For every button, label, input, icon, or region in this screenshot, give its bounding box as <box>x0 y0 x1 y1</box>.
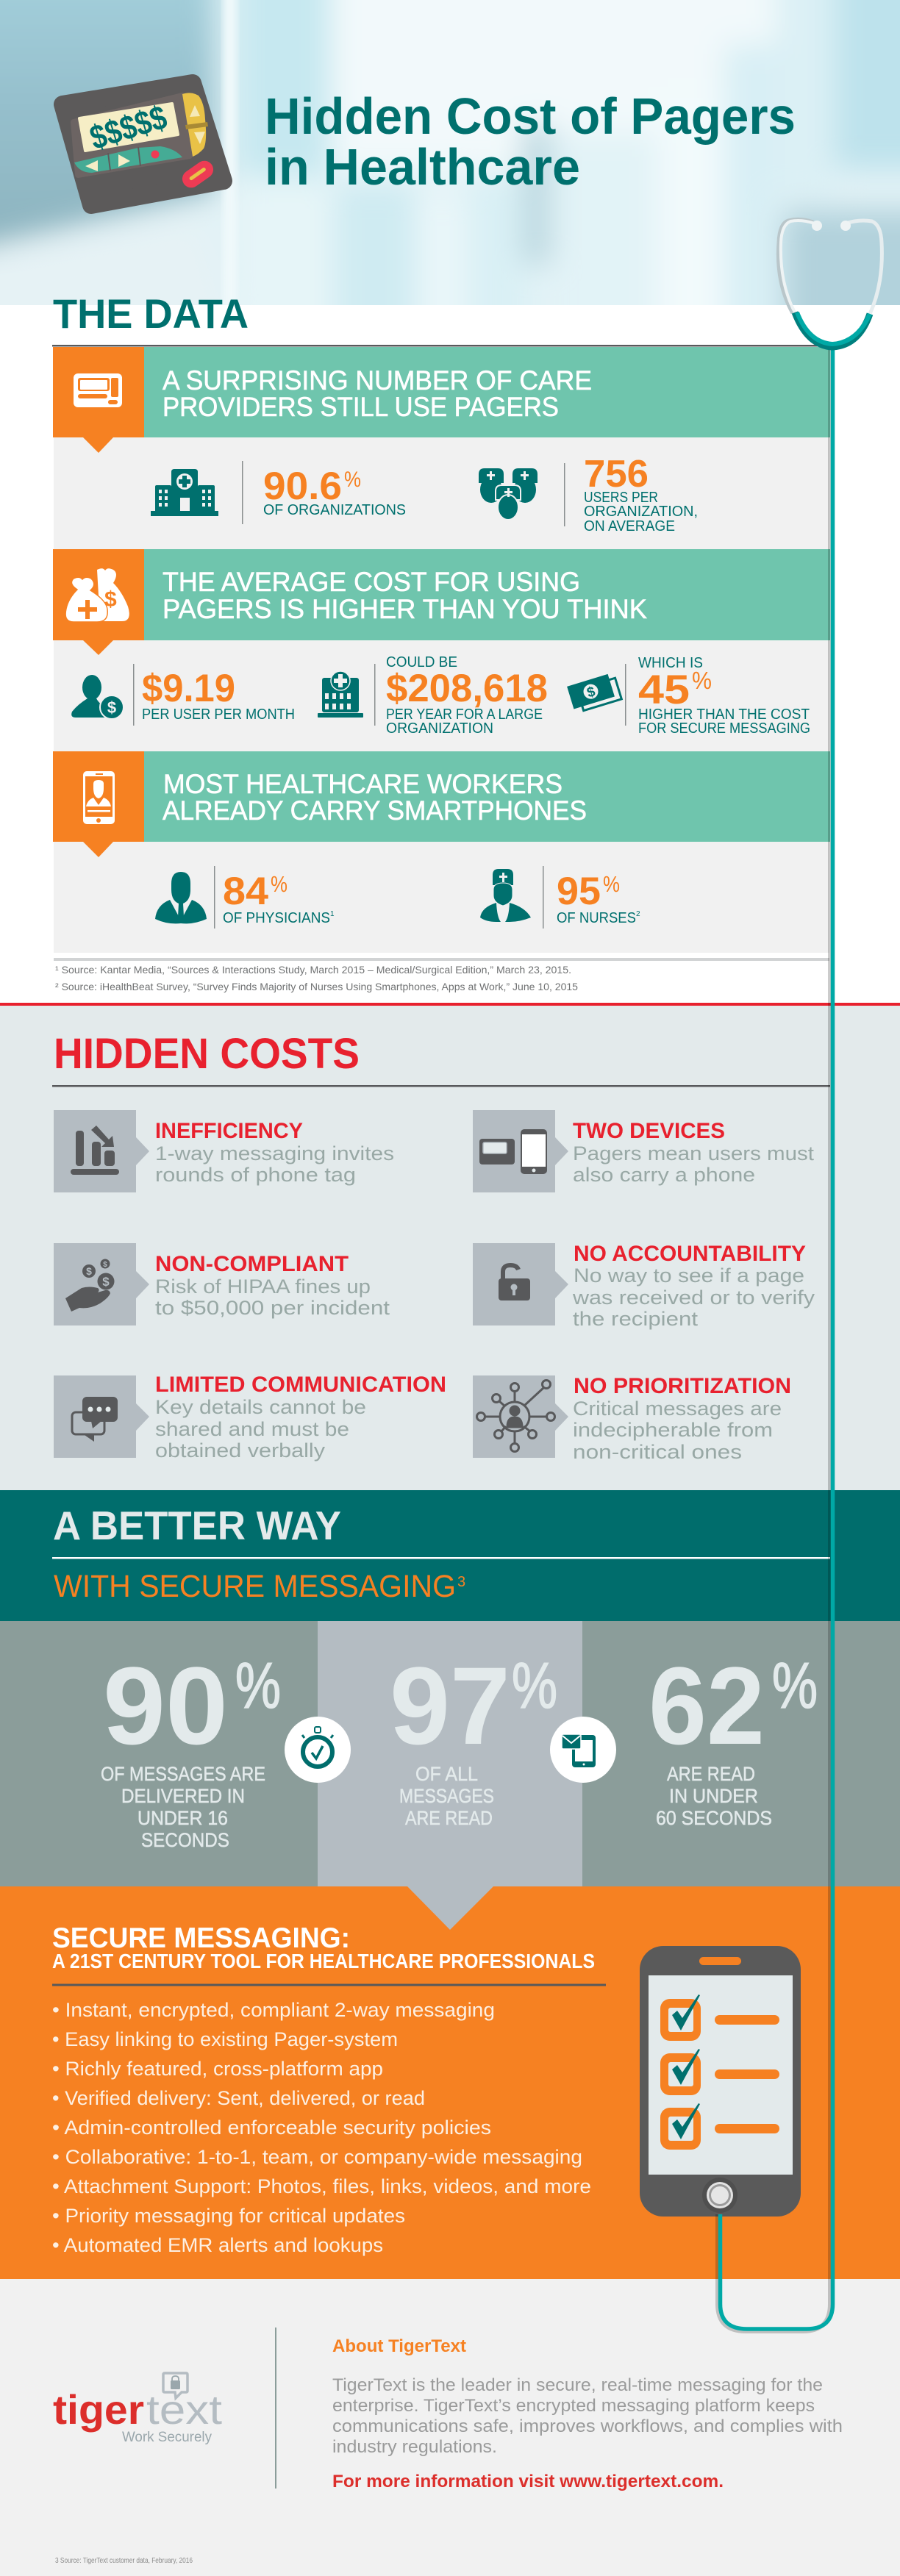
icon: stopwatch <box>285 1717 351 1783</box>
stat: 90 percent delivered: SECONDS <box>141 1829 229 1851</box>
stat: 756 users <box>584 453 698 534</box>
icon: cash: $ <box>585 684 597 701</box>
item: no prioritization: indecipherable from <box>573 1419 773 1441</box>
stat: 90 percent delivered: % <box>235 1649 281 1722</box>
icon: network <box>476 1381 554 1451</box>
item: limited communication: Key details cannot be <box>155 1396 366 1418</box>
icon: money bags: $ <box>104 587 117 612</box>
stat: 90 percent delivered: OF MESSAGES ARE <box>101 1763 265 1785</box>
feature list <box>52 1999 591 2256</box>
stat: 756 users: USERS PER <box>584 490 658 506</box>
stat: 97 percent read: % <box>512 1649 557 1722</box>
stat: 97 percent read: OF ALL <box>415 1763 478 1785</box>
item: non-compliant: to $50,000 per incident <box>155 1297 390 1319</box>
stat: 208,618 dollars: ORGANIZATION <box>386 720 493 737</box>
item: two devices: TWO DEVICES <box>573 1119 725 1143</box>
icon: hand with coins: $ <box>102 1275 110 1289</box>
icon: phone message <box>550 1717 616 1783</box>
stat: 90 percent delivered: UNDER 16 <box>138 1807 228 1829</box>
source footnote 3: 3 Source: TigerText customer data, February, 2016 <box>55 2557 193 2565</box>
icon: physician <box>155 872 207 923</box>
icon: falling bars <box>71 1126 119 1175</box>
heading: the data: THE DATA <box>53 290 249 337</box>
logo: tigertext: tiger <box>53 2386 144 2433</box>
panel: secure messaging <box>0 1886 900 2279</box>
source footnotes: ¹ Source: Kantar Media, “Sources & Interactions Study, March 2015 – Medical/Surgical Edition,” March 23, 2015. <box>55 964 571 976</box>
about tigertext: enterprise. TigerText’s encrypted messaging platform keeps <box>332 2396 815 2416</box>
heading: secure messaging: SECURE MESSAGING: <box>52 1922 350 1954</box>
checklist <box>660 1994 779 2150</box>
stat: 95 percent <box>557 870 640 926</box>
item: no prioritization <box>473 1374 791 1463</box>
heading: secure messaging: A 21ST CENTURY TOOL FOR HEALTHCARE PROFESSIONALS <box>52 1950 595 1972</box>
stat: 84 percent <box>223 870 335 926</box>
item: limited communication: obtained verbally <box>155 1439 326 1461</box>
stat: 84 percent: 1 <box>330 910 335 918</box>
item: two devices <box>473 1110 815 1192</box>
item: no accountability <box>473 1242 815 1330</box>
item: no accountability: the recipient <box>573 1308 699 1330</box>
stat: 97 percent read: MESSAGES <box>399 1785 494 1807</box>
stat: 97 percent read: ARE READ <box>405 1807 493 1829</box>
icon: care team <box>479 468 538 520</box>
feature list: • Collaborative: 1-to-1, team, or company-wide messaging <box>52 2146 582 2168</box>
title: Hidden Cost of Pagers <box>265 87 796 145</box>
band heading: PAGERS IS HIGHER THAN YOU THINK <box>162 594 647 624</box>
stat: 45 percent: HIGHER THAN THE COST <box>638 706 810 723</box>
item: inefficiency: 1-way messaging invites <box>155 1142 394 1164</box>
stat: 208,618 dollars: COULD BE <box>386 654 457 670</box>
band heading <box>162 567 647 624</box>
about tigertext: communications safe, improves workflows, and complies with <box>332 2416 843 2436</box>
item: non-compliant: Risk of HIPAA fines up <box>155 1276 371 1298</box>
title <box>265 87 796 196</box>
stat: 208,618 dollars <box>386 654 548 737</box>
source footnotes: ² Source: iHealthBeat Survey, “Survey Finds Majority of Nurses Using Smartphones, Apps at Work,” June 10, 2015 <box>55 981 578 992</box>
item: non-compliant: NON-COMPLIANT <box>155 1252 349 1276</box>
footer background <box>0 2279 900 2576</box>
stat: 84 percent: 84 <box>223 870 269 913</box>
panel: a better way header: WITH SECURE MESSAGING <box>54 1569 456 1604</box>
icon: chat bubbles <box>72 1397 118 1442</box>
stat: 62 percent read quickly: % <box>772 1649 818 1722</box>
stat: 208,618 dollars: PER YEAR FOR A LARGE <box>386 706 543 723</box>
item: non-compliant <box>54 1243 390 1325</box>
item: no accountability: was received or to verify <box>572 1287 815 1309</box>
stat: 97 percent read: 97 <box>390 1644 510 1767</box>
stat: 62 percent read quickly: 62 <box>649 1644 765 1767</box>
feature list: • Instant, encrypted, compliant 2-way messaging <box>52 1999 495 2021</box>
stat: 208,618 dollars: $208,618 <box>386 667 548 710</box>
logo: tigertext: Work Securely <box>122 2430 212 2445</box>
stat: 45 percent: % <box>692 667 712 694</box>
panel: average cost <box>53 549 830 751</box>
about tigertext: About TigerText <box>332 2336 466 2356</box>
icon: pager small <box>74 373 122 407</box>
icon: pager: $$$$$ <box>85 98 171 157</box>
stat: 9.19 dollars: $9.19 <box>142 667 235 710</box>
feature list: • Easy linking to existing Pager-system <box>52 2028 398 2050</box>
item: no accountability: NO ACCOUNTABILITY <box>574 1242 806 1266</box>
band heading: THE AVERAGE COST FOR USING <box>162 567 580 597</box>
about tigertext: For more information visit www.tigertext.com. <box>332 2472 724 2491</box>
panel: statistics <box>0 1621 900 1886</box>
stat: 90 percent delivered: 90 <box>103 1644 228 1767</box>
about tigertext <box>332 2336 843 2491</box>
feature list: • Verified delivery: Sent, delivered, or read <box>52 2087 425 2109</box>
stat: 9.19 dollars: PER USER PER MONTH <box>142 706 295 723</box>
panel: hidden costs <box>0 1003 900 1491</box>
stat: 756 users: ORGANIZATION, <box>584 504 698 520</box>
stat: 756 users: ON AVERAGE <box>584 518 675 534</box>
icon: pager and phone <box>479 1129 547 1174</box>
band heading: ALREADY CARRY SMARTPHONES <box>162 795 587 826</box>
stat: 84 percent: OF PHYSICIANS <box>223 910 330 926</box>
stat: 90.6 percent: 90.6 <box>263 465 342 508</box>
stat: 45 percent: 45 <box>638 666 690 712</box>
item: two devices: also carry a phone <box>573 1164 755 1186</box>
stat: 95 percent: OF NURSES <box>557 910 636 926</box>
band heading: PROVIDERS STILL USE PAGERS <box>162 392 559 422</box>
about tigertext: industry regulations. <box>332 2437 497 2457</box>
hero background: blurred hospital corridor <box>0 0 900 305</box>
source footnotes <box>55 964 578 992</box>
icon: hand with coins: $ <box>86 1265 92 1277</box>
panel: a better way header: 3 <box>457 1574 465 1590</box>
panel: surprising number of care providers <box>53 347 830 549</box>
logo: tigertext <box>53 2373 222 2445</box>
item: no prioritization: Critical messages are <box>573 1398 782 1420</box>
stat: 62 percent read quickly: ARE READ <box>667 1763 755 1785</box>
icon: person with dollar: $ <box>107 698 116 717</box>
icon: hand with coins <box>65 1259 115 1312</box>
stat: 97 percent read <box>390 1644 557 1829</box>
stat: 90 percent delivered: DELIVERED IN <box>121 1785 245 1807</box>
band heading: A SURPRISING NUMBER OF CARE <box>162 365 592 396</box>
band heading: MOST HEALTHCARE WORKERS <box>163 769 562 799</box>
icon: hospital <box>151 469 218 516</box>
item: limited communication: shared and must be <box>155 1418 349 1440</box>
logo: tigertext: text <box>146 2386 222 2433</box>
icon: money bags <box>65 568 129 622</box>
heading: hidden costs: HIDDEN COSTS <box>54 1030 360 1078</box>
stat: 62 percent read quickly: IN UNDER <box>669 1785 758 1807</box>
icon: smartphone with doctor <box>83 771 115 824</box>
item: inefficiency: rounds of phone tag <box>155 1164 356 1186</box>
heading: secure messaging <box>52 1922 595 1972</box>
feature list: • Attachment Support: Photos, files, links, videos, and more <box>52 2175 591 2197</box>
stat: 84 percent: % <box>271 871 288 897</box>
title: in Healthcare <box>265 138 580 196</box>
icon: person with dollar <box>71 675 124 719</box>
stat: 90.6 percent: OF ORGANIZATIONS <box>263 502 406 518</box>
stat: 90 percent delivered <box>101 1644 281 1851</box>
stat: 90.6 percent: % <box>344 468 361 492</box>
illustration: phone with checklist <box>640 1946 801 2217</box>
icon: cash <box>567 673 621 713</box>
stat: 45 percent: WHICH IS <box>638 655 703 671</box>
item: no accountability: No way to see if a page <box>574 1264 804 1287</box>
icon: pager <box>63 83 224 205</box>
panel: a better way header: A BETTER WAY <box>53 1503 341 1548</box>
feature list: • Automated EMR alerts and lookups <box>52 2234 383 2256</box>
icon: nurse <box>480 869 531 922</box>
stat: 62 percent read quickly <box>649 1644 818 1829</box>
item: no prioritization: NO PRIORITIZATION <box>574 1374 791 1398</box>
feature list: • Richly featured, cross-platform app <box>52 2058 383 2080</box>
item: limited communication <box>54 1373 446 1461</box>
stat: 95 percent: 95 <box>557 870 601 913</box>
about tigertext: TigerText is the leader in secure, real-time messaging for the <box>332 2375 823 2395</box>
stat: 95 percent: % <box>603 871 620 897</box>
icon: hospital building <box>318 671 363 718</box>
feature list: • Admin-controlled enforceable security policies <box>52 2117 491 2139</box>
stat: 90.6 percent <box>263 465 406 518</box>
stat: 62 percent read quickly: 60 SECONDS <box>656 1807 772 1829</box>
stat: 45 percent: FOR SECURE MESSAGING <box>638 720 810 737</box>
stat: 756 users: 756 <box>584 453 649 495</box>
icon: hand with coins: $ <box>103 1261 107 1269</box>
stat: 9.19 dollars <box>142 667 295 723</box>
stethoscope running down the page <box>718 219 882 2331</box>
feature list: • Priority messaging for critical updates <box>52 2205 405 2227</box>
band heading <box>162 365 592 422</box>
item: no prioritization: non-critical ones <box>573 1441 742 1463</box>
icon: open lock <box>499 1265 530 1300</box>
item: inefficiency <box>54 1110 394 1192</box>
item: limited communication: LIMITED COMMUNICATION <box>155 1373 446 1397</box>
band heading <box>162 769 587 826</box>
panel: a better way header <box>0 1490 900 1622</box>
stat: 45 percent <box>638 655 810 737</box>
panel: smartphones <box>53 751 830 953</box>
item: inefficiency: INEFFICIENCY <box>155 1119 303 1143</box>
stat: 95 percent: 2 <box>636 910 640 918</box>
item: two devices: Pagers mean users must <box>573 1142 815 1164</box>
